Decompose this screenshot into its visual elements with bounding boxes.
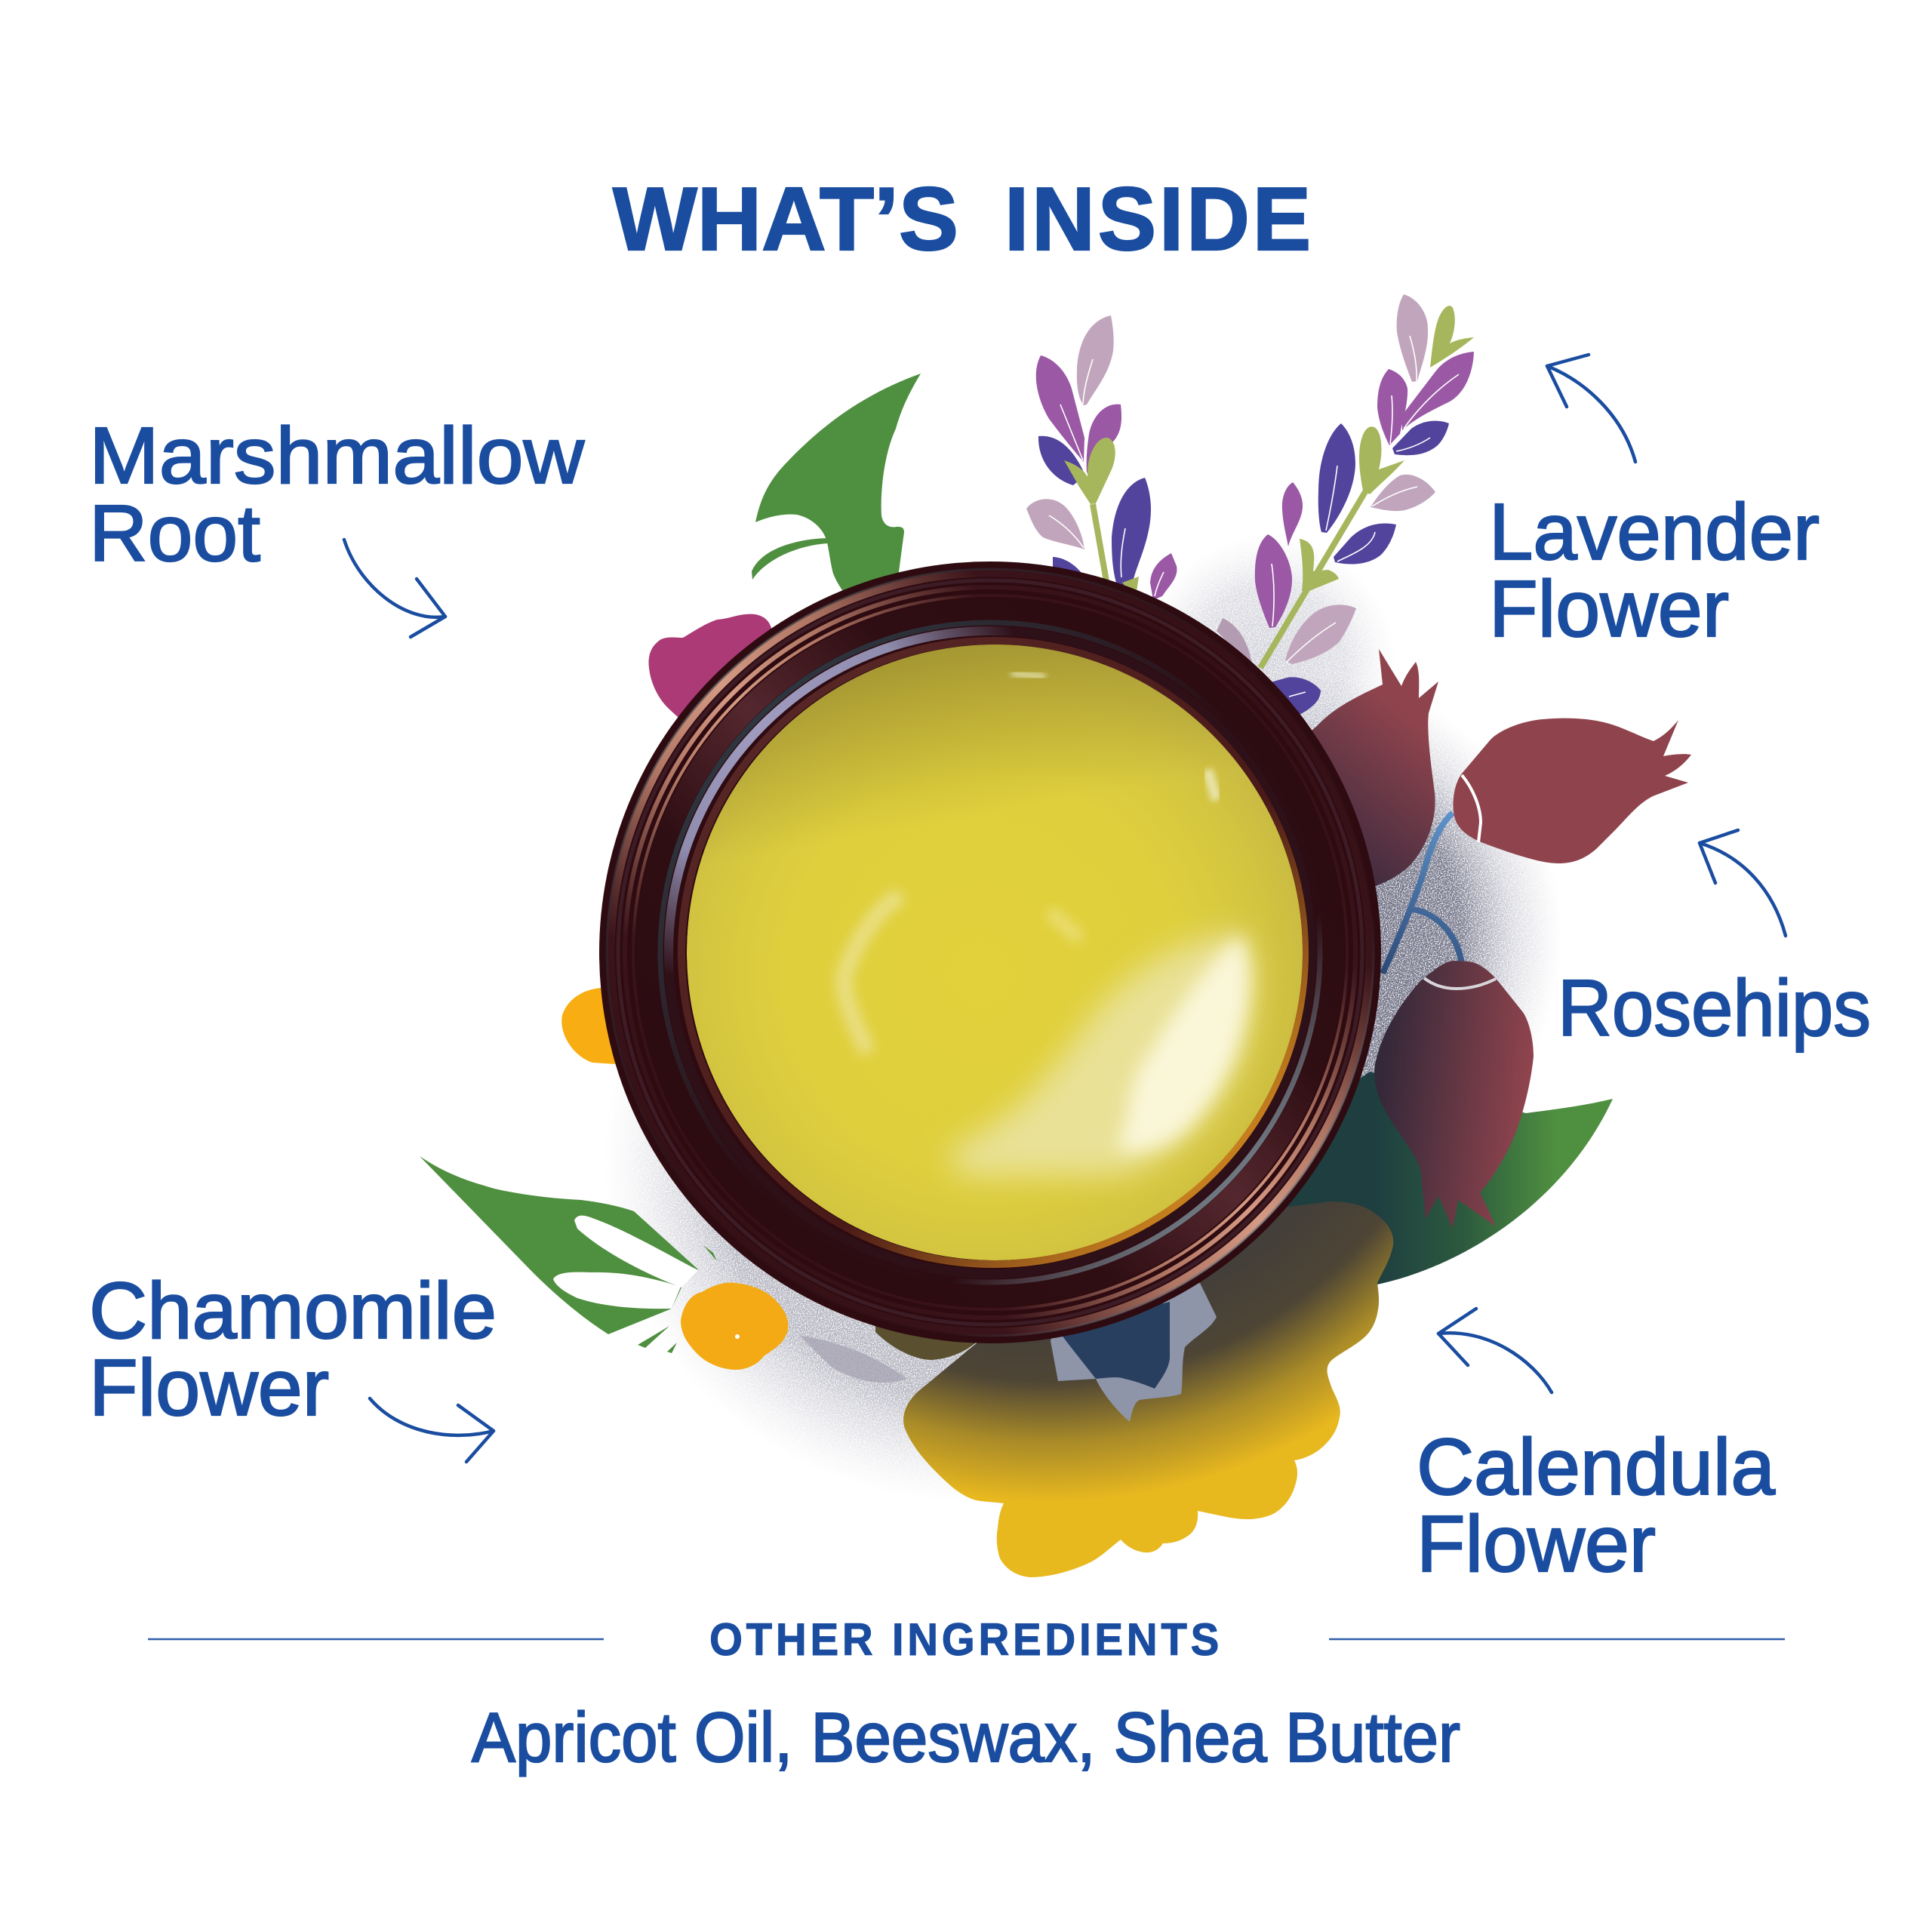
balm surface [687, 645, 1303, 1260]
arrow: Lavender Flower [1547, 355, 1635, 462]
illustration: rosehip top behind jar [1283, 649, 1438, 887]
illustration: rosehip stems [1383, 813, 1462, 974]
illustration: lavender sprig left [1026, 315, 1177, 600]
arrow: Marshmallow Root [344, 540, 445, 637]
label: Chamomile Flower: Flower [89, 1343, 329, 1432]
label: Lavender Flower [1489, 488, 1820, 654]
label: Calendula Flower: Flower [1417, 1500, 1656, 1589]
label: Chamomile Flower: Chamomile [89, 1266, 497, 1355]
illustration: calendula flower [903, 1201, 1393, 1577]
glare lower right [949, 932, 1253, 1176]
illustration: magenta marshmallow flower [649, 614, 785, 717]
illustration: grey and navy petal over calendula [1051, 1283, 1217, 1422]
illustration: rosehip lower [1374, 961, 1534, 1229]
soft speckled shadow behind jar [604, 536, 1562, 1502]
subheading: other ingredients: OTHER INGREDIENTS [709, 1614, 1223, 1665]
arrow: Rosehips [1700, 830, 1786, 936]
label: Chamomile Flower [89, 1266, 497, 1432]
title [613, 169, 1314, 269]
jar rim [599, 561, 1381, 1343]
title: WHAT’S [613, 169, 958, 269]
illustration: lavender sprig right [1217, 294, 1474, 715]
illustration: chamomile petals and leaf [420, 1156, 717, 1353]
arrow: Calendula Flower [1438, 1309, 1552, 1392]
illustration: chamomile centre [681, 1283, 788, 1370]
illustration: faded petals under jar [800, 1313, 975, 1383]
label: Calendula Flower [1417, 1423, 1775, 1589]
illustration: small chamomile blossom behind jar left [561, 988, 615, 1064]
arrow: Chamomile Flower [370, 1398, 494, 1462]
illustration: big green leaf bottom right [1283, 1072, 1613, 1284]
illustration: marshmallow root leaf [752, 374, 921, 592]
label: Lavender Flower: Flower [1489, 565, 1729, 654]
text: other ingredients list: Apricot Oil, Beeswax, Shea Butter [472, 1698, 1460, 1777]
illustration: rosehip right [1454, 718, 1691, 863]
title: INSIDE [1004, 169, 1314, 269]
label: Calendula Flower: Calendula [1417, 1423, 1775, 1512]
infographic canvas [92, 186, 1869, 1777]
label: Rosehips: Rosehips [1558, 964, 1871, 1053]
label: Lavender Flower: Lavender [1489, 488, 1820, 577]
label: Marshmallow Root [89, 411, 584, 578]
label: Marshmallow Root: Root [89, 489, 260, 578]
label: Marshmallow Root: Marshmallow [89, 411, 584, 500]
product: balm jar [599, 561, 1381, 1343]
